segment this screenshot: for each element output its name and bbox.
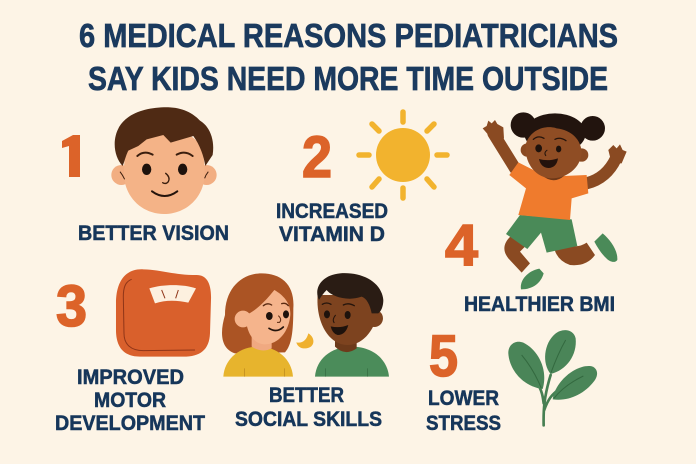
panel: better vision: [62, 107, 229, 245]
icon: weighing scale: [116, 269, 211, 357]
panel: healthier bmi: [445, 112, 627, 316]
label: better vision: BETTER VISION: [78, 221, 229, 245]
label: increased vitamin d: [276, 199, 388, 246]
label: better social skills: [235, 383, 382, 431]
label: improved motor development: IMPROVED: [77, 365, 184, 389]
panel: lower stress: [426, 324, 597, 435]
number 3: 3: [56, 274, 87, 339]
number 2: 2: [302, 125, 332, 190]
label: increased vitamin d: VITAMIN D: [279, 222, 385, 246]
panel: increased vitamin d: [276, 112, 447, 246]
label: better social skills: BETTER: [269, 383, 344, 407]
icon: two children talking: [222, 273, 389, 377]
icon: green plant: [508, 330, 597, 425]
icon: sun: [359, 112, 447, 198]
label: healthier bmi: HEALTHIER BMI: [464, 292, 615, 316]
label: better social skills: SOCIAL SKILLS: [235, 407, 382, 431]
label: improved motor development: MOTOR: [94, 388, 166, 412]
number 5: 5: [429, 324, 458, 389]
title: [79, 17, 618, 97]
label: lower stress: [426, 386, 501, 435]
label: improved motor development: DEVELOPMENT: [55, 411, 205, 435]
icon: boy face: [111, 107, 217, 214]
label: lower stress: LOWER: [428, 386, 499, 410]
icon: jumping girl: [483, 112, 627, 289]
number 4: 4: [445, 213, 478, 278]
panel: better social skills: [222, 273, 389, 431]
title: SAY KIDS NEED MORE TIME OUTSIDE: [88, 60, 608, 97]
number 1: [62, 135, 80, 177]
label: improved motor development: [55, 365, 205, 435]
panel: improved motor development: [55, 269, 211, 435]
label: lower stress: STRESS: [426, 411, 501, 435]
title: 6 MEDICAL REASONS PEDIATRICIANS: [79, 17, 618, 54]
label: increased vitamin d: INCREASED: [276, 199, 388, 223]
